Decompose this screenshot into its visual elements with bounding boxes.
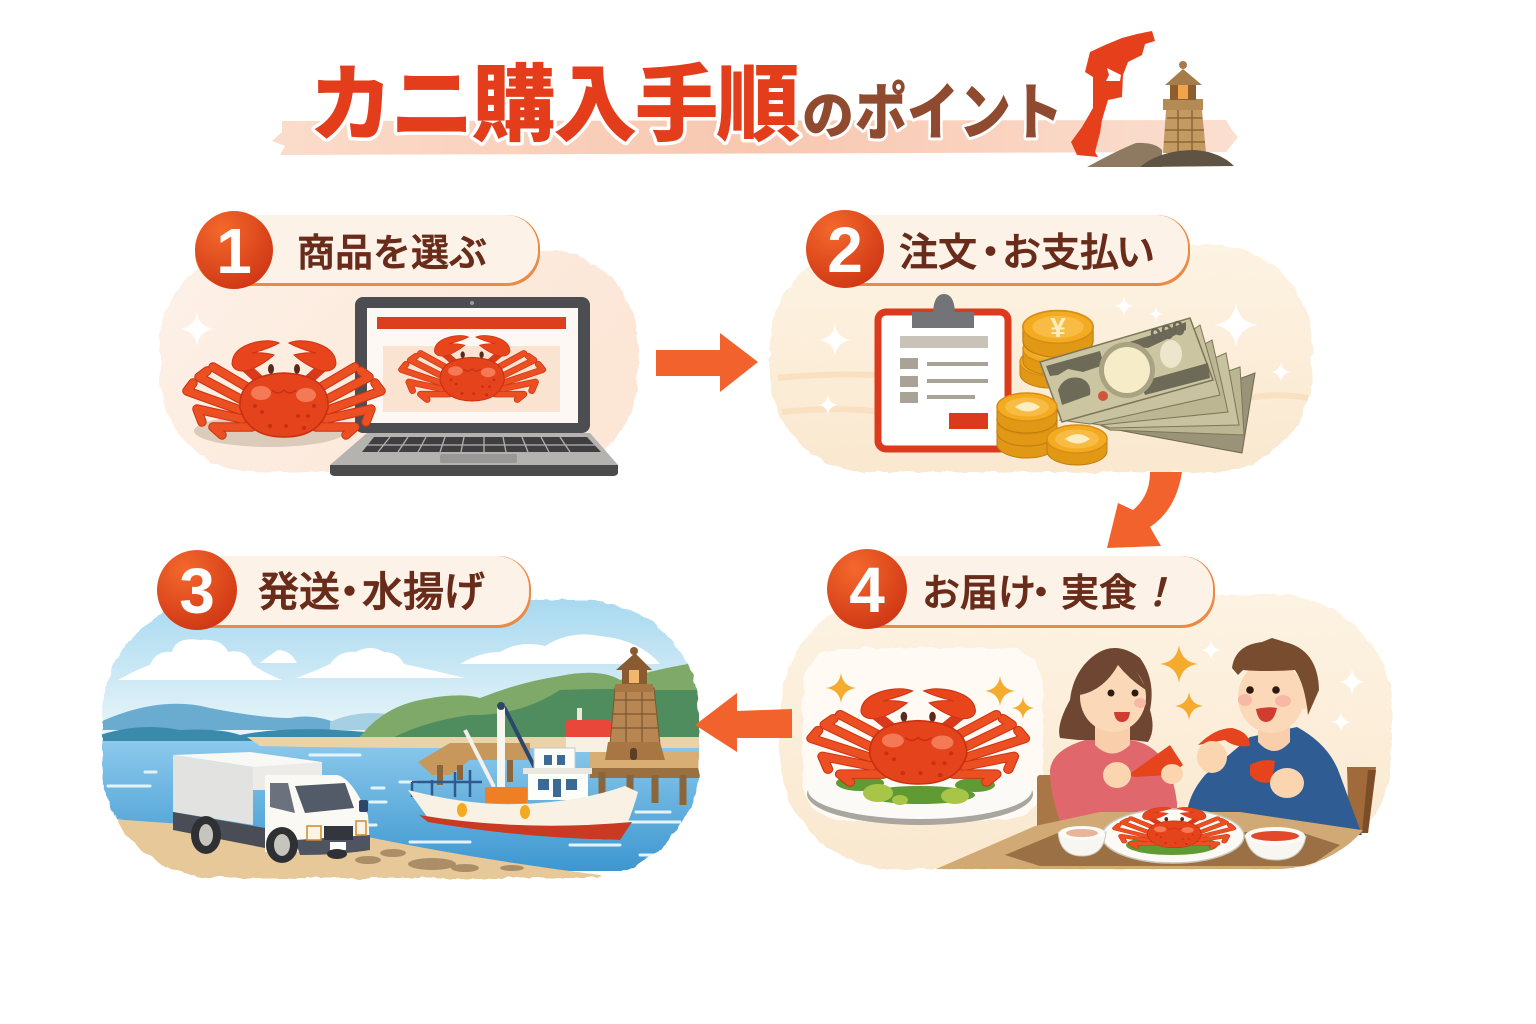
- delivery truck: [173, 752, 370, 863]
- meal on table: [1058, 807, 1306, 863]
- icon: Noto peninsula map: [1071, 31, 1155, 157]
- sparkle: [180, 312, 214, 346]
- water highlights: [108, 755, 680, 855]
- step label: [806, 210, 1190, 288]
- step label: 3: [179, 555, 215, 627]
- arrow: step 4 to 3: [695, 693, 792, 752]
- man: [1187, 638, 1362, 835]
- step label: ・: [971, 232, 1010, 275]
- title text: suffix: ポイント: [855, 79, 1063, 148]
- fishing boat: [408, 702, 638, 840]
- step label: い: [1116, 232, 1155, 275]
- step label: 4: [849, 554, 885, 626]
- step label: 発送: [258, 569, 340, 615]
- lighthouse: [605, 647, 665, 760]
- pier: [418, 743, 700, 805]
- coins: back stack: [1020, 311, 1093, 388]
- title text: suffix: の: [802, 88, 854, 146]
- panel: step 3: [90, 550, 710, 890]
- step label: ・: [1022, 573, 1060, 615]
- step label: お届け: [922, 573, 1036, 615]
- title text: main: カニ購入手順: [309, 58, 800, 152]
- title: [272, 58, 1238, 155]
- step label: [157, 550, 531, 630]
- sparkles: [818, 296, 1291, 415]
- arrow: step 1 to 2: [656, 333, 758, 392]
- panel background: [770, 245, 1312, 472]
- laptop: [330, 297, 618, 476]
- panel: step 4: [780, 549, 1392, 869]
- step label: [195, 211, 540, 289]
- panel background: [780, 595, 1392, 869]
- step label: 1: [216, 215, 252, 287]
- step label: [827, 549, 1215, 629]
- clouds: [118, 634, 660, 680]
- step label: ！: [1138, 573, 1176, 615]
- step label: 実食: [1061, 573, 1137, 615]
- panel: step 2: [770, 210, 1312, 472]
- money: [1040, 316, 1255, 453]
- chairs: [1037, 767, 1376, 835]
- step label: ・: [329, 569, 370, 615]
- clipboard: [878, 294, 1008, 449]
- step label: 2: [827, 214, 863, 286]
- sand beach: [117, 818, 602, 880]
- icon: lighthouse on rocks: [1087, 61, 1234, 167]
- step label: お支払: [1002, 232, 1119, 275]
- step label: 水揚げ: [362, 569, 485, 615]
- yen mark: ¥: [1050, 312, 1066, 343]
- red-roofed house: [565, 708, 616, 752]
- panel background: [160, 250, 638, 472]
- harbor scene: [90, 590, 710, 890]
- woman: [1050, 648, 1183, 835]
- crab: [187, 341, 381, 447]
- dining table: [936, 812, 1375, 869]
- step label: 注文: [899, 232, 977, 275]
- step label: 商品を選ぶ: [297, 233, 487, 275]
- banknote value: 000: [1147, 316, 1188, 349]
- title brush stripe: [272, 120, 1238, 155]
- arrow: step 2 to 4: [1107, 472, 1182, 548]
- crab plate card: [803, 648, 1043, 825]
- panel: step 1: [160, 211, 638, 476]
- sparkles: [826, 645, 1203, 720]
- coins: front stacks: [997, 393, 1107, 465]
